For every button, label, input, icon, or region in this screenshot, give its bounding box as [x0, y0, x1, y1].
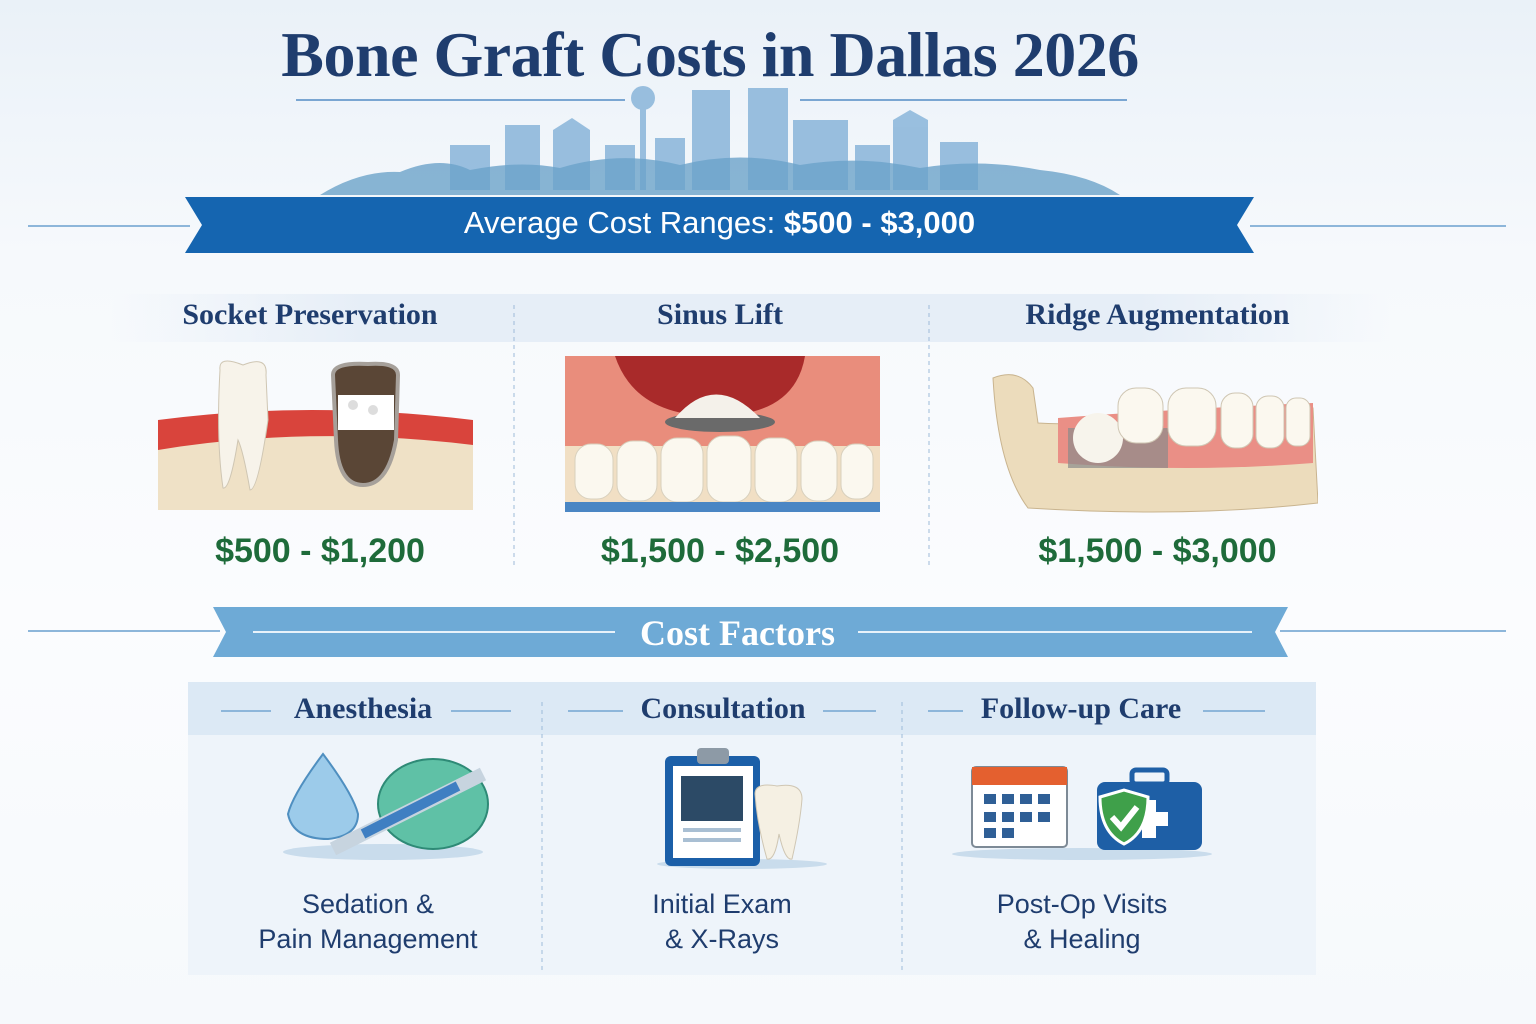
panel: sinus lift: [565, 298, 880, 570]
factor: follow-up care: Post-Op Visits: [997, 889, 1167, 919]
panel: ridge augmentation: [992, 298, 1318, 570]
factor: follow-up care: Follow-up Care: [981, 692, 1181, 725]
banner: average cost: [185, 197, 1254, 253]
icon: mask and syringe: [283, 752, 489, 860]
column header bands: [231, 294, 1268, 342]
icon: clipboard and tooth: [657, 748, 827, 869]
factor: anesthesia: Sedation &: [302, 889, 434, 919]
panel: factors: [188, 682, 1316, 975]
banner: cost factors: Cost Factors: [640, 613, 835, 653]
price: socket: $500 - $1,200: [215, 532, 425, 570]
illustration: socket: [158, 360, 473, 510]
factor: consultation: Consultation: [640, 692, 806, 725]
factor: anesthesia: Anesthesia: [294, 692, 432, 725]
icon: calendar and first aid: [952, 766, 1212, 860]
panel: ridge augmentation: Ridge Augmentation: [1025, 298, 1290, 331]
title: Bone Graft Costs in Dallas 2026: [281, 19, 1139, 90]
price: ridge: $1,500 - $3,000: [1038, 532, 1277, 570]
panel: socket preservation: [158, 298, 473, 570]
factor: anesthesia: [258, 692, 489, 954]
skyline: [28, 86, 1506, 227]
price: sinus: $1,500 - $2,500: [601, 532, 839, 570]
illustration: ridge: [992, 374, 1318, 512]
factor: follow-up care: & Healing: [1023, 924, 1141, 954]
factor: consultation: [640, 692, 827, 954]
factor: follow-up care: [952, 692, 1212, 954]
banner: cost factors: [28, 607, 1506, 657]
banner: average cost: Average Cost Ranges: $500 - $3,000: [464, 205, 975, 240]
factor: consultation: Initial Exam: [652, 889, 792, 919]
panel: socket preservation: Socket Preservation: [182, 298, 438, 331]
panel: sinus lift: Sinus Lift: [657, 298, 783, 331]
factor: consultation: & X-Rays: [665, 924, 779, 954]
factor: anesthesia: Pain Management: [258, 924, 478, 954]
illustration: sinus: [565, 356, 880, 512]
